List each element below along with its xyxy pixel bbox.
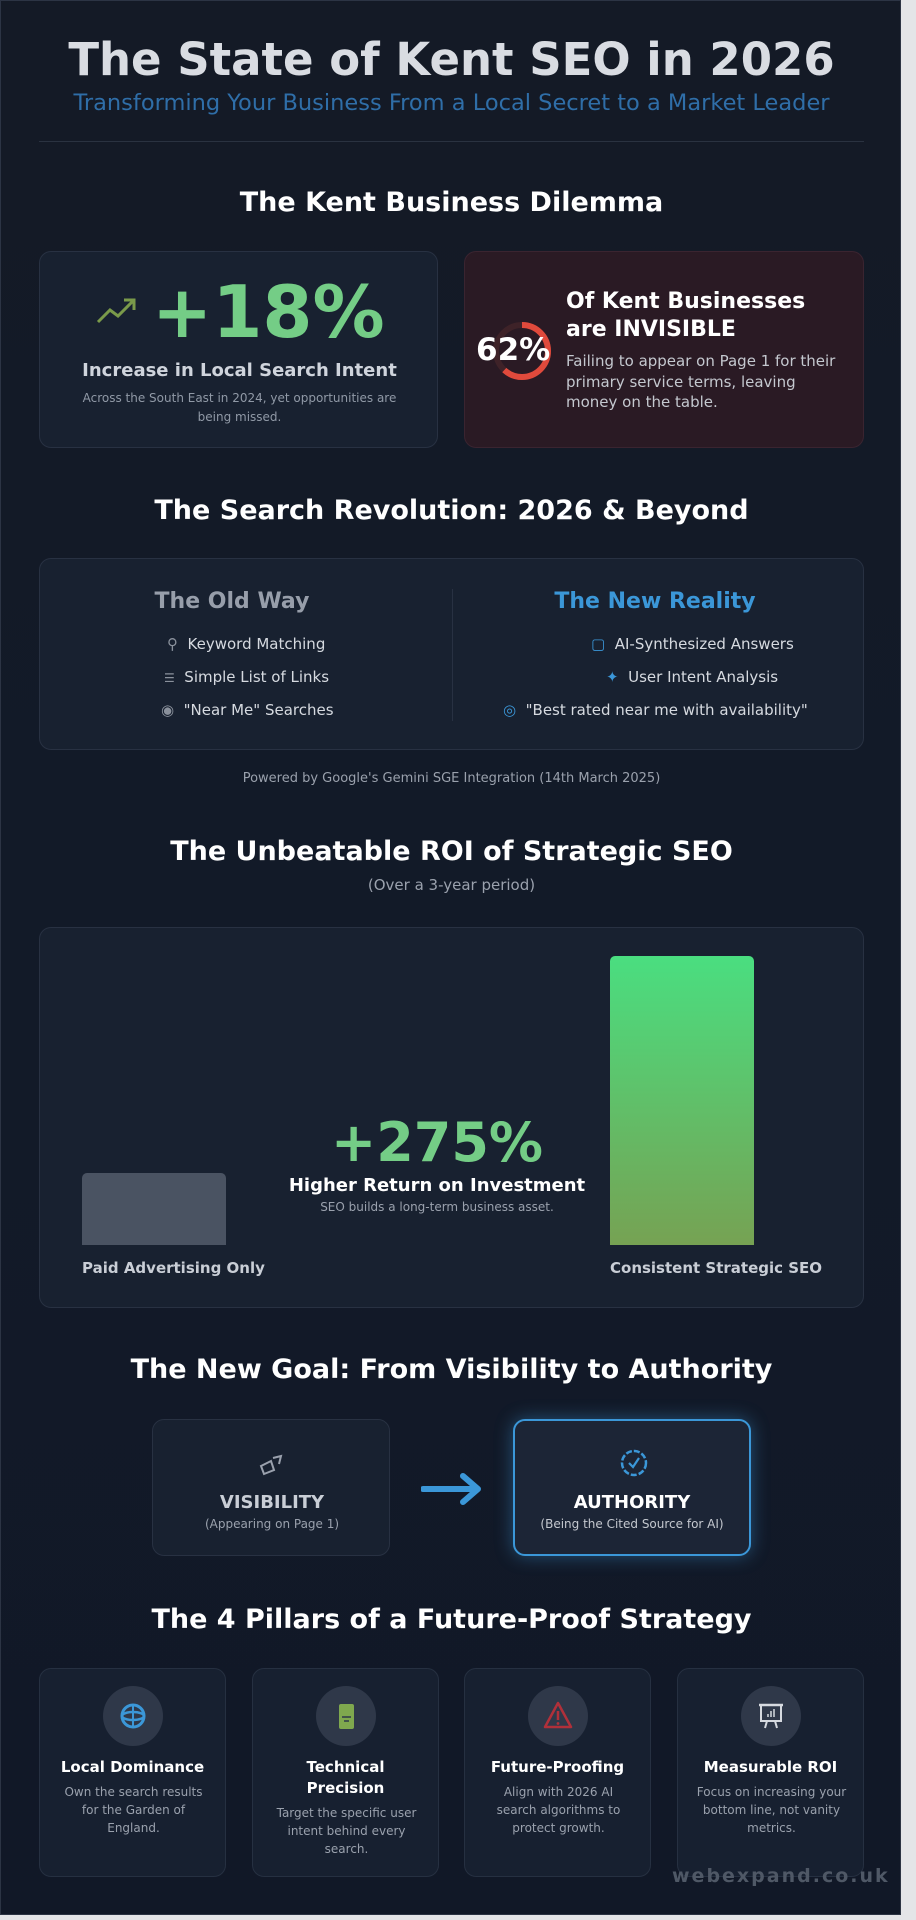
- pillar: local dominance: Local Dominance: [61, 1758, 204, 1776]
- column: old way: [154, 589, 334, 719]
- panel: old vs new: [39, 558, 864, 750]
- pillar: technical precision: Precision: [307, 1779, 384, 1797]
- label: Increase in Local Search Intent: [82, 360, 397, 381]
- column: new reality: ▢ AI-Synthesized Answers: [591, 635, 794, 653]
- heading: Of Kent Businesses: [566, 289, 805, 314]
- title: The State of Kent SEO in 2026: [68, 33, 835, 86]
- pillar: measurable ROI: Measurable ROI: [704, 1758, 837, 1776]
- icon: badge check: [620, 1450, 648, 1476]
- heading: dilemma: The Kent Business Dilemma: [240, 187, 663, 218]
- pillar: future-proofing: Future-Proofing: [491, 1758, 624, 1776]
- caption: powered by: Powered by Google's Gemini SGE Integration (14th March 2025): [243, 771, 660, 786]
- icon: mobile: [316, 1686, 376, 1746]
- box: visibility: [152, 1419, 390, 1556]
- icon: presentation chart: [741, 1686, 801, 1746]
- watermark: webexpand.co.uk: [672, 1865, 890, 1887]
- subtitle: Transforming Your Business From a Local Secret to a Market Leader: [73, 90, 830, 116]
- pillar: technical precision: [252, 1668, 439, 1877]
- bar: strategic SEO: [610, 956, 754, 1245]
- pillar: measurable ROI: [677, 1668, 864, 1877]
- box: authority: [513, 1419, 751, 1556]
- column: new reality: The New Reality: [554, 589, 756, 614]
- stat: 62%: 62%: [476, 332, 550, 368]
- pillar: local dominance: Own the search results for the Garden of England.: [64, 1785, 203, 1835]
- column: new reality: ◎ "Best rated near me with availability": [503, 701, 808, 719]
- icon: globe: [103, 1686, 163, 1746]
- box: authority: (Being the Cited Source for AI): [540, 1517, 724, 1531]
- subheading: (Over a 3-year period): [368, 876, 535, 894]
- label: SEO: Consistent Strategic SEO: [610, 1259, 822, 1277]
- column: old way: The Old Way: [155, 589, 309, 614]
- arrow: [421, 1473, 481, 1505]
- pillar: technical precision: Target the specific user intent behind every search.: [277, 1806, 416, 1856]
- column: old way: ☰ Simple List of Links: [164, 668, 329, 686]
- note: Across the South East in 2024, yet opportunities are being missed.: [83, 391, 396, 424]
- panel: ROI chart: [39, 927, 864, 1308]
- column: new reality: [503, 589, 808, 719]
- heading: new goal: The New Goal: From Visibility to Authority: [131, 1354, 772, 1385]
- callout: +275%: [289, 1111, 585, 1214]
- description: Failing to appear on Page 1 for their primary service terms, leaving money on the table.: [566, 352, 835, 411]
- column: new reality: ✦ User Intent Analysis: [606, 668, 778, 686]
- callout: +275%: +275%: [331, 1111, 543, 1174]
- panel: invisible businesses: [464, 251, 864, 448]
- heading: [566, 289, 805, 342]
- pillar: future-proofing: [464, 1668, 651, 1877]
- callout: +275%: SEO builds a long-term business asset.: [320, 1200, 554, 1214]
- pillar: local dominance: [39, 1668, 226, 1877]
- heading: ROI: The Unbeatable ROI of Strategic SEO: [170, 836, 733, 867]
- label: paid: Paid Advertising Only: [82, 1259, 265, 1277]
- panel: search intent stat: [39, 251, 438, 448]
- bar: paid advertising: [82, 1173, 226, 1245]
- heading: are INVISIBLE: [566, 317, 736, 342]
- pillar: future-proofing: Align with 2026 AI search algorithms to protect growth.: [497, 1785, 620, 1835]
- heading: 4 pillars: The 4 Pillars of a Future-Proof Strategy: [151, 1604, 752, 1635]
- callout: +275%: Higher Return on Investment: [289, 1175, 585, 1196]
- heading: search revolution: The Search Revolution: 2026 & Beyond: [154, 495, 749, 526]
- box: visibility: (Appearing on Page 1): [205, 1517, 339, 1531]
- icon: eye-off: [260, 1454, 282, 1476]
- icon: trend arrow: [97, 298, 136, 323]
- box: visibility: VISIBILITY: [220, 1492, 324, 1513]
- column: old way: ◉ "Near Me" Searches: [161, 701, 334, 719]
- stat: +18%: +18%: [152, 270, 385, 354]
- pillar: measurable ROI: Focus on increasing your bottom line, not vanity metrics.: [697, 1785, 846, 1835]
- box: authority: AUTHORITY: [574, 1492, 690, 1513]
- icon: warning: [528, 1686, 588, 1746]
- column: old way: ⚲ Keyword Matching: [167, 635, 325, 653]
- pillar: technical precision: Technical: [307, 1758, 384, 1776]
- donut chart 62%: [494, 322, 551, 380]
